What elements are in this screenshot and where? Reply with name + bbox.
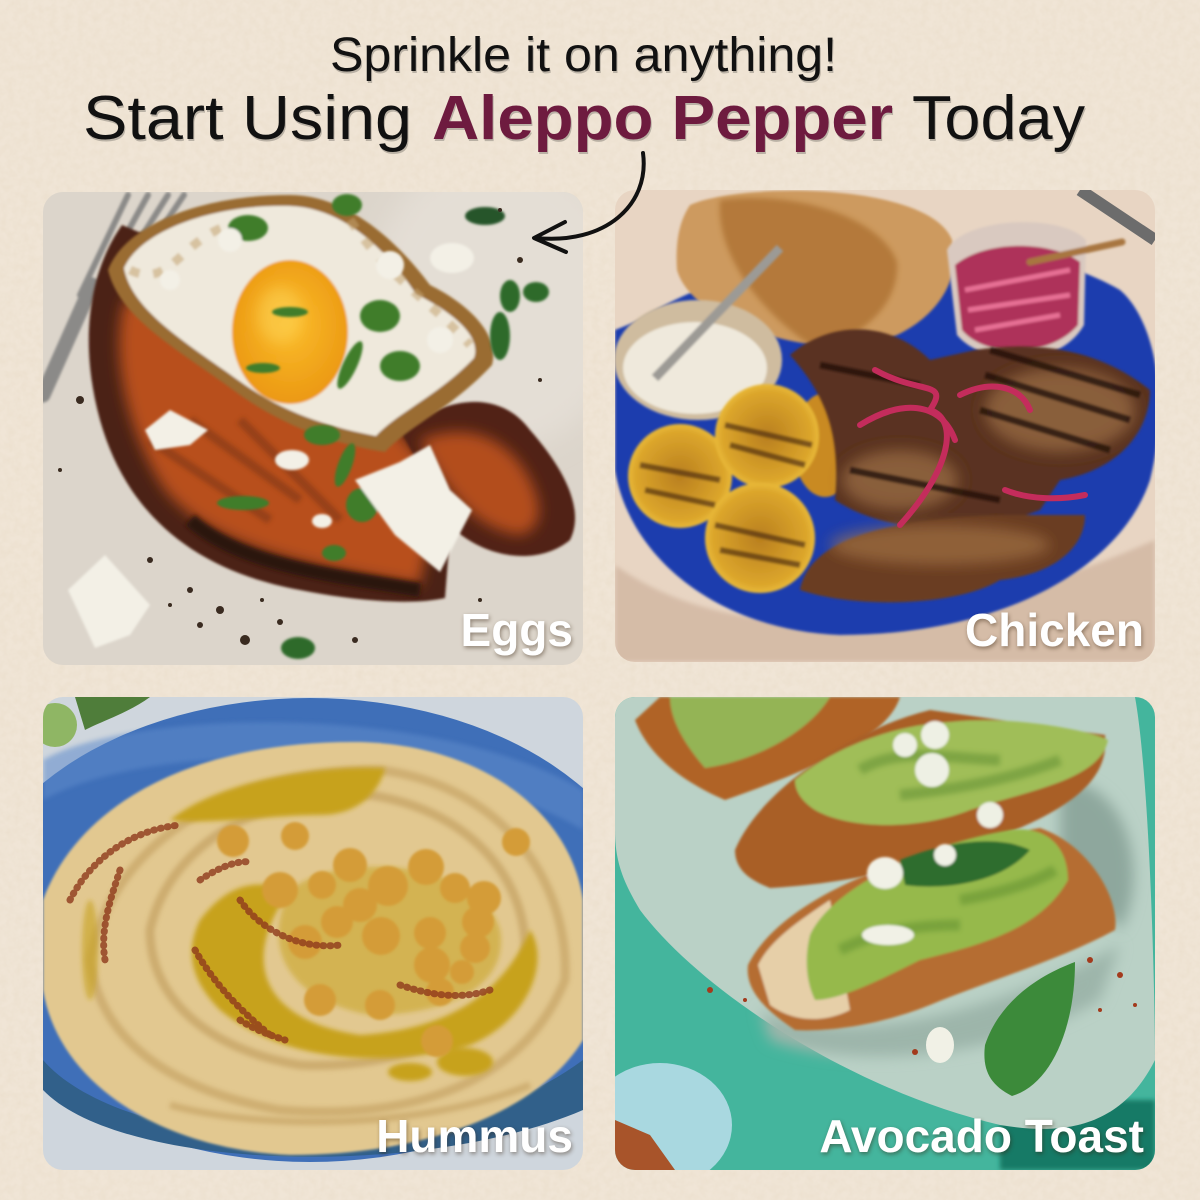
chili flakes [707,957,1137,1063]
sauce bowl [614,248,782,420]
grilled lemons [628,384,857,593]
title [83,84,1085,153]
toast back [635,697,900,800]
icon: fork [43,195,184,395]
cucumber [33,697,150,747]
blue bowl [43,698,583,1162]
mint leaf [984,962,1075,1096]
toast front [748,828,1116,1030]
spice specks [58,208,542,645]
olive oil [82,768,538,1081]
toast middle [735,710,1108,888]
chickpeas [217,822,530,1057]
label: chicken: Chicken [965,604,1144,656]
sumac [70,825,490,1040]
arrow [534,153,644,252]
title: Aleppo Pepper [432,84,893,153]
hummus swirl [43,742,583,1155]
label: avocado toast: Avocado Toast [819,1110,1144,1162]
small dish [615,1063,732,1170]
knife [1080,190,1155,240]
title: Start Using [83,84,412,153]
subtitle: Sprinkle it on anything! [330,29,837,82]
panel: chicken [614,190,1159,662]
grilled chicken [790,329,1150,602]
label: eggs: Eggs [461,604,573,656]
sweet potato [89,225,575,602]
pickled onion jar [947,222,1122,359]
panel: hummus [43,697,583,1170]
herbs and feta [68,194,549,659]
blue plate [615,247,1159,635]
title: Today [912,84,1085,153]
pita bread [677,191,954,348]
panel: avocado toast [588,697,1155,1187]
pale plate [615,697,1155,1129]
fried egg [108,195,493,452]
label: hummus: Hummus [376,1110,573,1162]
pickled onions on chicken [860,370,1085,525]
panel: eggs [43,192,583,665]
